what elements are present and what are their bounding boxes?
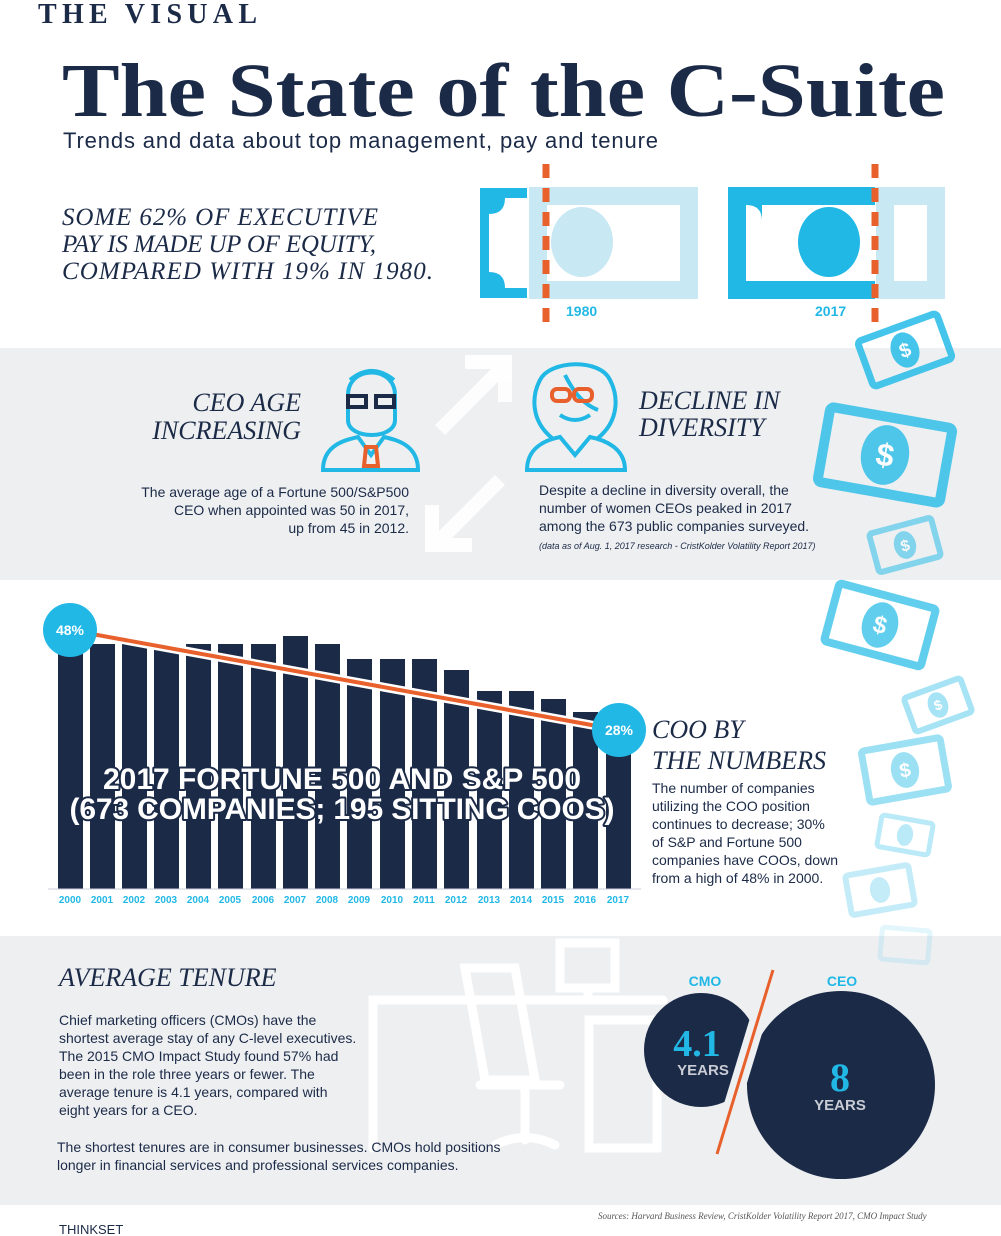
icon: bill 1980: 1980 [566,303,597,319]
chart: tenure circles: CMO [689,973,721,989]
bar chart: COO share 2000-2017: 2004 [187,895,210,906]
heading: CEO age [151,388,301,445]
equity statement: PAY IS MADE UP OF EQUITY, [61,231,376,258]
heading: decline in diversity [638,386,782,442]
text: tenure: longer in financial services and professional services companies. [57,1157,459,1173]
chart: tenure circles: CEO [827,973,857,989]
icon: female CEO [527,364,625,470]
text: tenure: average tenure is 4.1 years, compared with [59,1084,327,1100]
bar chart: COO share 2000-2017: 2015 [542,895,565,906]
equity statement: COMPARED WITH 19% IN 1980. [62,258,433,285]
title: The State of the C-Suite [62,49,945,133]
text: diversity: number of women CEOs peaked in 2017 [539,500,792,516]
text: COO [652,780,838,886]
icon: falling money bills: $ [896,339,914,363]
bar chart: COO share 2000-2017: 2014 [510,895,533,906]
text: CEO age [141,484,409,536]
icon: bill 1980 [480,164,689,322]
equity statement [61,204,433,285]
heading: COO by the numbers: COO BY [652,715,746,744]
icon: falling money bills: $ [932,696,945,714]
bar chart: COO share 2000-2017: 2008 [316,895,339,906]
text: COO: from a high of 48% in 2000. [652,870,823,886]
heading: decline in diversity: DIVERSITY [638,413,767,442]
text: tenure: Chief marketing officers (CMOs) have the [59,1012,316,1028]
icon: falling money bills: $ [873,436,897,474]
text: COO: continues to decrease; 30% [652,816,825,832]
bar chart: COO share 2000-2017: 2003 [155,895,178,906]
icon: falling money bills: $ [870,611,890,640]
heading: decline in diversity: DECLINE IN [638,386,782,415]
text: COO: companies have COOs, down [652,852,838,868]
icon: falling money bills: $ [899,537,912,556]
bar chart: COO share 2000-2017: 28% [605,722,634,738]
text: diversity: among the 673 public companies surveyed. [539,518,809,534]
heading: average tenure: AVERAGE TENURE [57,963,277,992]
text: diversity: Despite a decline in diversity overall, the [539,482,789,498]
text: diversity: (data as of Aug. 1, 2017 research - CristKolder Volatility Report 2017) [539,541,815,551]
bar chart: COO share 2000-2017: 2006 [252,895,275,906]
icon: bill 2017 [728,164,936,322]
equity statement: SOME 62% OF EXECUTIVE [62,204,378,231]
text: tenure: The shortest tenures are in consumer businesses. CMOs hold positions [57,1139,501,1155]
bar chart: COO share 2000-2017: 2016 [574,895,597,906]
bar chart: COO share 2000-2017: 2000 [59,895,82,906]
text: CEO age: up from 45 in 2012. [288,520,409,536]
sources: Sources: Harvard Business Review, CristKolder Volatility Report 2017, CMO Impact Study [598,1211,927,1221]
bar chart: COO share 2000-2017: 2013 [478,895,501,906]
text: COO: of S&P and Fortune 500 [652,834,802,850]
bar chart: COO share 2000-2017: 2012 [445,895,468,906]
background bands [0,348,1001,1205]
icon: falling money bills: $ [898,759,913,783]
bar chart: COO share 2000-2017: 2009 [348,895,371,906]
chart: tenure circles: YEARS [814,1097,866,1114]
bar chart: COO share 2000-2017: 2005 [219,895,242,906]
chart: tenure circles [644,970,935,1179]
bar chart: COO share 2000-2017: 2011 [413,895,435,906]
icon: desk and chair [373,943,663,1148]
text: tenure: The 2015 CMO Impact Study found 57% had [59,1048,338,1064]
bar chart: COO share 2000-2017: 2017 [607,895,630,906]
text: tenure: eight years for a CEO. [59,1102,198,1118]
bar chart: COO share 2000-2017: 48% [56,622,85,638]
text: COO: The number of companies [652,780,815,796]
text: CEO age: The average age of a Fortune 500/S&P500 [141,484,409,500]
chart: tenure circles: YEARS [677,1062,729,1079]
text: tenure [57,1012,501,1173]
text: COO: utilizing the COO position [652,798,810,814]
bar chart: COO share 2000-2017: 2017 FORTUNE 500 AND S&P 500 [103,763,581,796]
subtitle: Trends and data about top management, pay and tenure [63,128,658,153]
heading: CEO age: CEO AGE [192,388,301,417]
bar chart: COO share 2000-2017: (673 COMPANIES; 195 SITTING COOS) [70,793,614,826]
text: diversity [539,482,815,551]
text: CEO age: CEO when appointed was 50 in 2017, [174,502,409,518]
icon: male CEO [323,371,418,470]
bar chart: COO share 2000-2017: 2001 [91,895,114,906]
decorative arrows [432,362,505,545]
icon: bill 2017: 2017 [815,303,846,319]
text: tenure: been in the role three years or fewer. The [59,1066,315,1082]
heading: COO by the numbers [652,715,826,775]
icon: falling money bills [817,313,972,963]
chart: tenure circles: 4.1 [673,1023,721,1065]
bar chart: COO share 2000-2017: 2007 [284,895,307,906]
heading: COO by the numbers: THE NUMBERS [652,746,826,775]
bar chart: COO share 2000-2017 [43,603,646,906]
bar chart: COO share 2000-2017: 2010 [381,895,404,906]
text: tenure: shortest average stay of any C-level executives. [59,1030,356,1046]
bar chart: COO share 2000-2017: 2002 [123,895,146,906]
chart: tenure circles: 8 [830,1055,850,1100]
heading: CEO age: INCREASING [151,416,301,445]
